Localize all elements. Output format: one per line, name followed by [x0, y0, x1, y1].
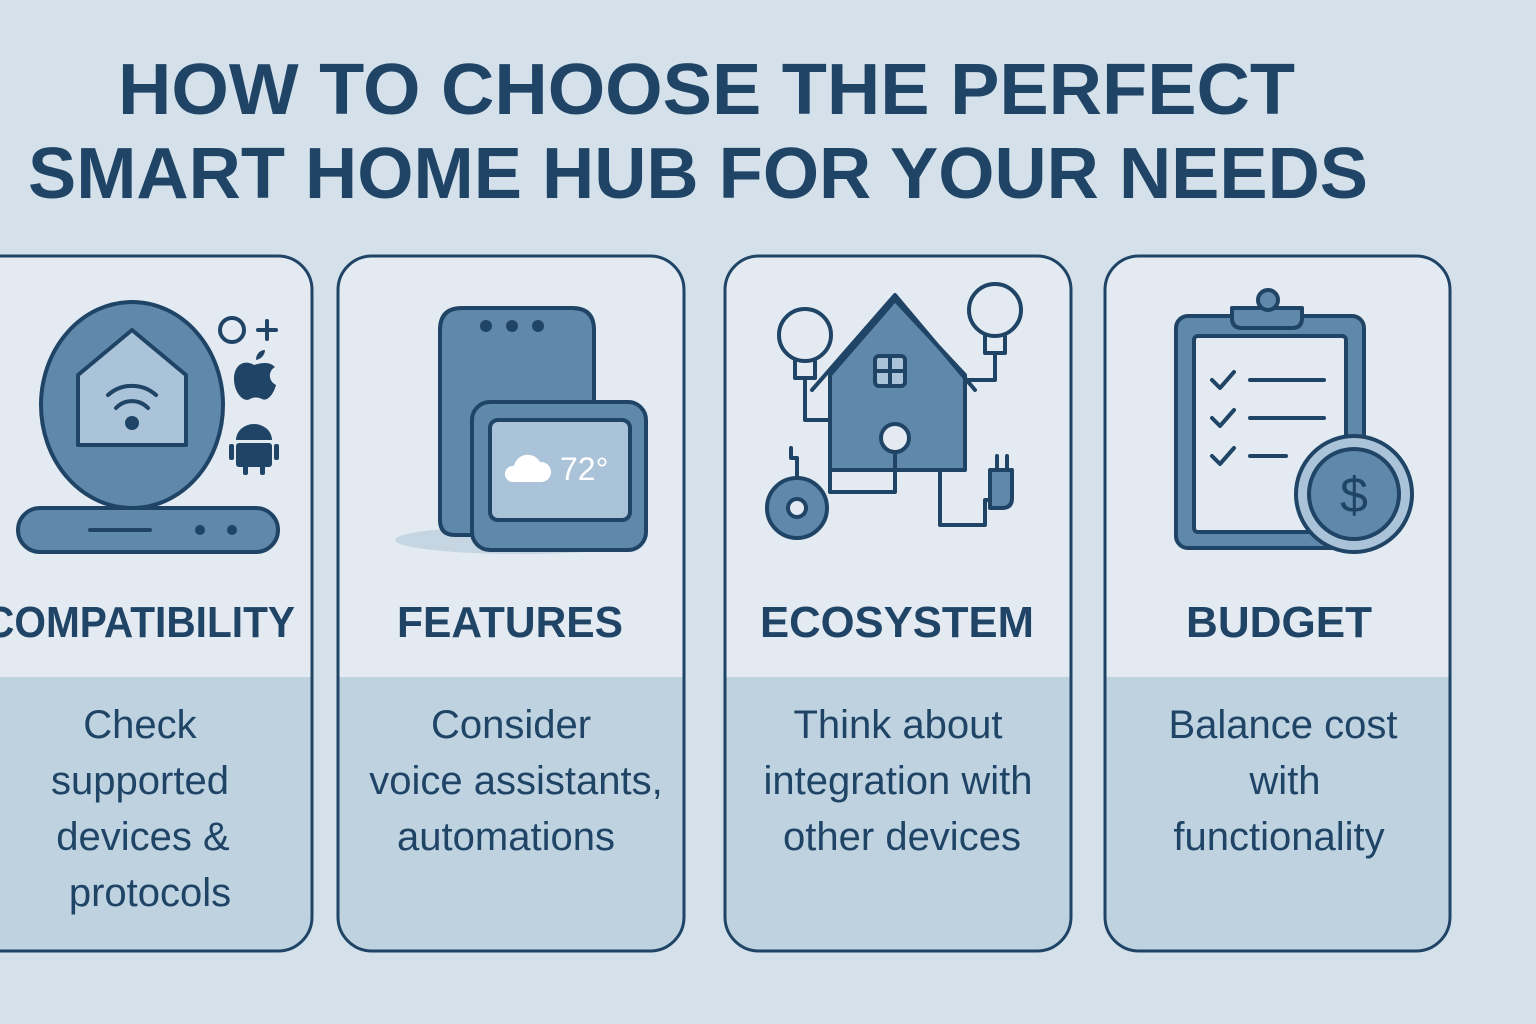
- text: compatibility body: [51, 703, 231, 915]
- icon: clipboard with dollar coin: [1176, 290, 1412, 552]
- icon: weather 72: [505, 451, 608, 487]
- icon: dollar sign: $: [1340, 467, 1368, 523]
- title: SMART HOME HUB FOR YOUR NEEDS: [28, 134, 1368, 214]
- text: budget body: Balance cost: [1168, 703, 1398, 747]
- panel: compatibility: [0, 256, 312, 951]
- text: features body: automations: [397, 815, 615, 859]
- icon: android logo: [229, 424, 279, 475]
- text: compatibility body: protocols: [69, 871, 231, 915]
- text: ecosystem body: integration with: [763, 759, 1033, 803]
- panel: budget: [1105, 256, 1450, 951]
- text: budget body: [1168, 703, 1398, 859]
- heading: budget: BUDGET: [1186, 598, 1372, 647]
- icon: connected house: [767, 284, 1021, 538]
- text: ecosystem body: [763, 703, 1033, 859]
- heading: ecosystem: ECOSYSTEM: [760, 598, 1034, 647]
- text: features body: [369, 703, 663, 859]
- icon: apple logo: [234, 350, 276, 400]
- text: budget body: functionality: [1173, 815, 1385, 859]
- heading: features: FEATURES: [397, 598, 623, 647]
- icon: weather 72: 72°: [560, 451, 608, 487]
- title: [28, 50, 1368, 214]
- text: features body: Consider: [431, 703, 591, 747]
- text: features body: voice assistants,: [369, 759, 663, 803]
- icon: smart speaker and display: [395, 308, 646, 554]
- text: ecosystem body: other devices: [783, 815, 1021, 859]
- text: compatibility body: Check: [83, 703, 198, 747]
- text: compatibility body: supported: [51, 759, 229, 803]
- text: compatibility body: devices &: [56, 815, 230, 859]
- panel: ecosystem: [725, 256, 1071, 951]
- icon: hub with house: [18, 302, 278, 552]
- text: ecosystem body: Think about: [793, 703, 1003, 747]
- title: HOW TO CHOOSE THE PERFECT: [118, 50, 1295, 130]
- text: budget body: with: [1248, 759, 1321, 803]
- panel: features: [338, 256, 684, 951]
